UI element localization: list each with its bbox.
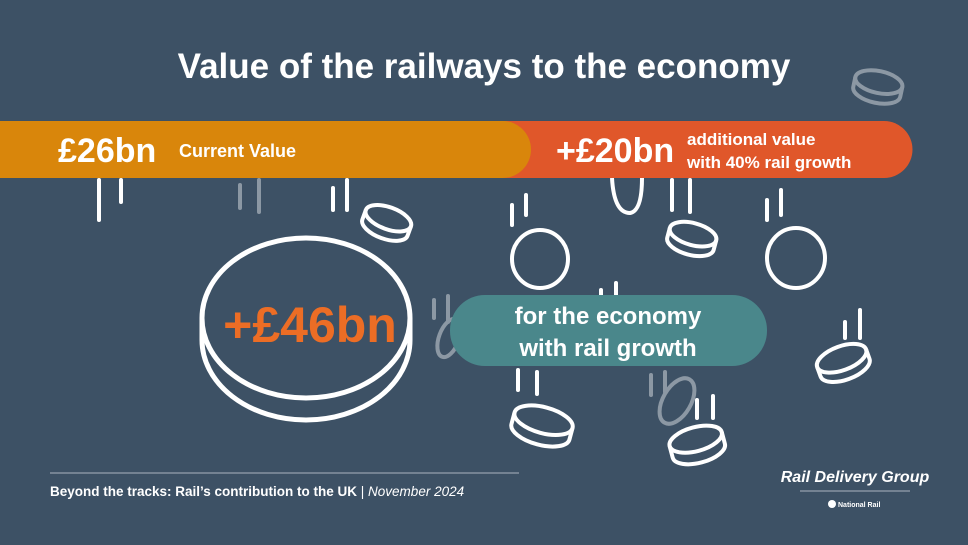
falling lines decoration — [99, 180, 860, 418]
icon: coin top right — [851, 66, 905, 108]
bar: current value: £26bn — [58, 132, 156, 170]
bar: additional value: +£20bn — [556, 132, 674, 170]
callout: for the economy — [450, 295, 767, 366]
logo: Rail Delivery Group: National Rail — [838, 502, 880, 509]
big coin: +£46bn — [223, 297, 397, 353]
icon: small coins — [359, 178, 874, 469]
footer source: Beyond the tracks: Rail’s contribution to the UK | November 2024 — [50, 484, 464, 499]
bar: additional value — [500, 121, 912, 178]
logo: Rail Delivery Group — [781, 469, 929, 509]
bar: current value: Current Value — [179, 141, 296, 161]
logo: Rail Delivery Group: Rail Delivery Group — [781, 469, 929, 486]
bar: additional value: with 40% rail growth — [686, 153, 851, 172]
bar: current value — [0, 121, 531, 178]
callout: for the economy: for the economy — [515, 303, 702, 330]
callout: for the economy: with rail growth — [518, 335, 697, 362]
bar: additional value: additional value — [687, 130, 815, 149]
title: Value of the railways to the economy — [178, 47, 791, 86]
big coin — [202, 238, 410, 420]
